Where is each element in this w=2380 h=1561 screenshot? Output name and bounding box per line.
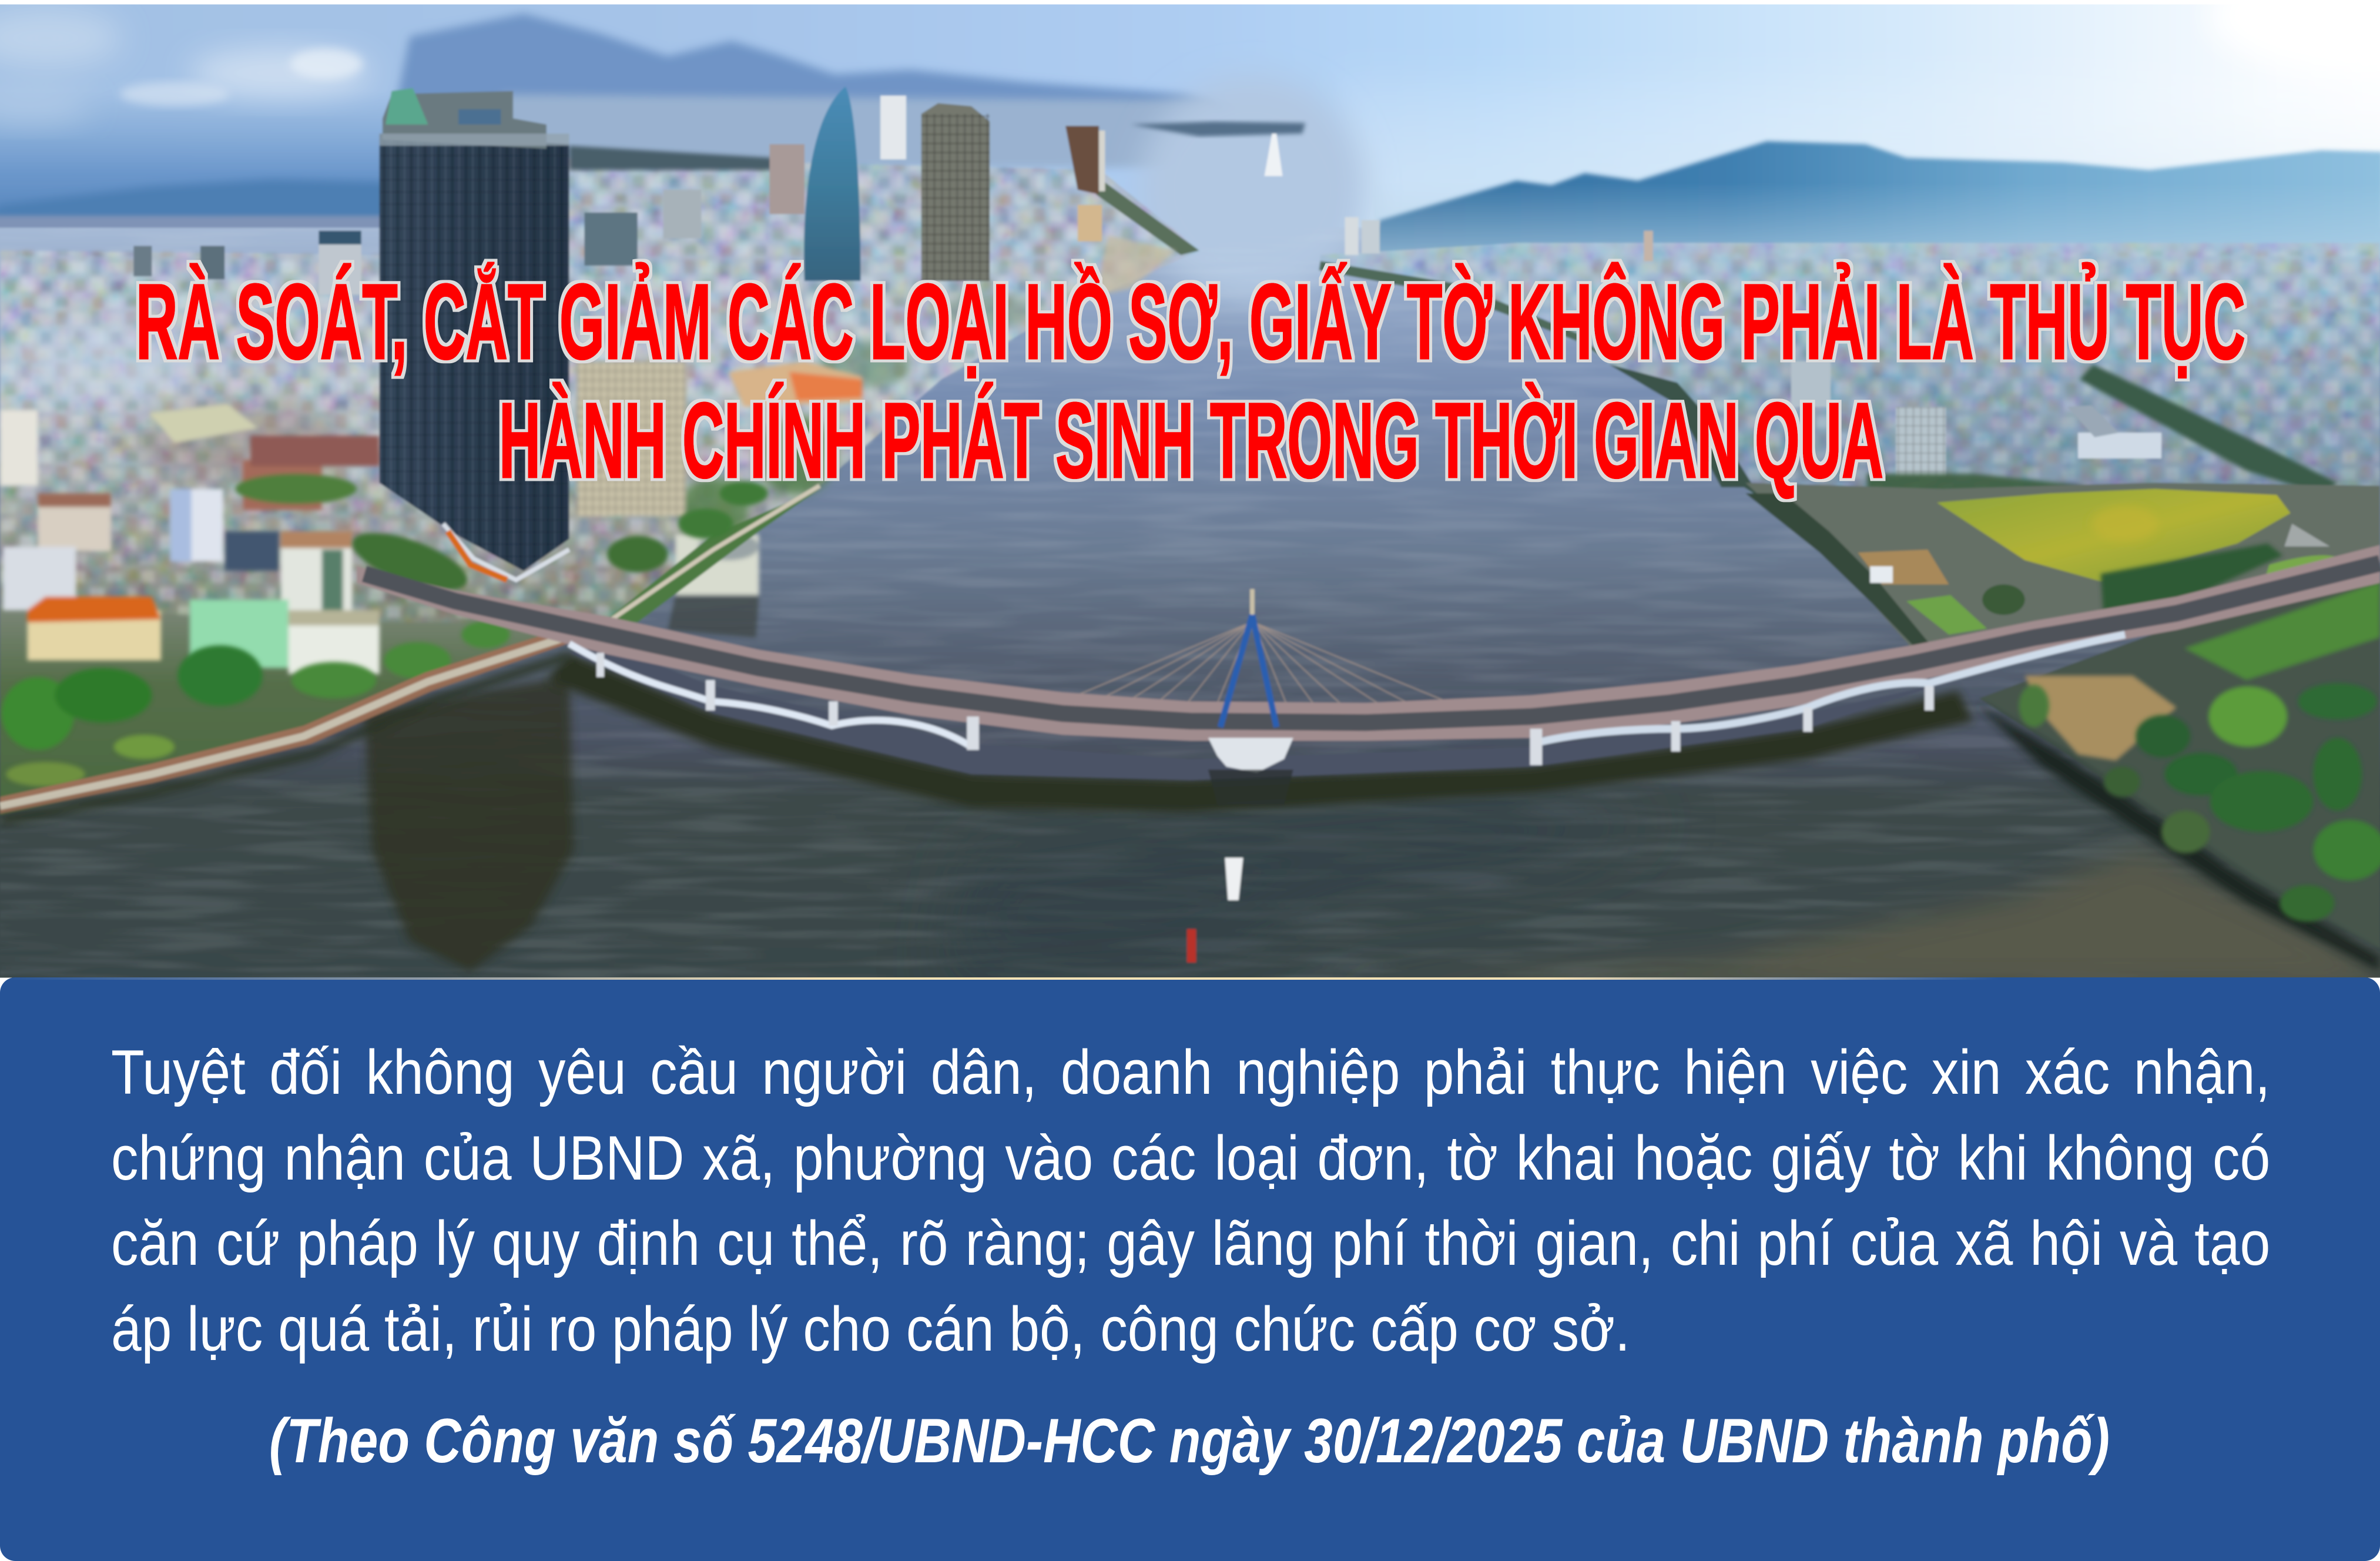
left city land bbox=[0, 146, 1199, 815]
bridge reflections and cable fan bbox=[1062, 622, 1457, 713]
far mountains behind city bbox=[0, 14, 1237, 258]
cable-stayed pylon bbox=[1208, 589, 1293, 805]
title bbox=[136, 259, 2247, 502]
panel top highlight line bbox=[0, 977, 2380, 980]
bridge piers bbox=[596, 653, 1934, 765]
river buoys bbox=[1187, 857, 1243, 963]
body text block: chứng nhận của UBND xã, phường vào các loại đơn, tờ khai hoặc giấy tờ khi không có bbox=[111, 1123, 2270, 1193]
body text block: áp lực quá tải, rủi ro pháp lý cho cán bộ, công chức cấp cơ sở. bbox=[111, 1294, 1630, 1364]
bridge deck bbox=[357, 545, 2380, 747]
left low-rise buildings bbox=[0, 361, 862, 674]
sky bbox=[0, 5, 2380, 228]
left trees and riverside promenade bbox=[0, 481, 820, 821]
right city bbox=[1319, 217, 2380, 651]
right bank park and lawns bbox=[1745, 483, 2380, 656]
panel: blue background bbox=[0, 977, 2380, 1561]
body text block: Tuyệt đối không yêu cầu người dân, doanh nghiệp phải thực hiện việc xin xác nhận, bbox=[111, 1037, 2270, 1107]
far towers bbox=[133, 86, 1105, 294]
right bank lower bbox=[1973, 580, 2380, 972]
waterfront islet and small bridge on the horizon bbox=[1131, 122, 1305, 176]
photo: aerial view of Da Nang river and bridge bbox=[0, 5, 2380, 978]
right mountains bbox=[1366, 141, 2380, 258]
river bbox=[0, 76, 2380, 987]
main skyscraper bbox=[380, 88, 569, 580]
body text block: căn cứ pháp lý quy định cụ thể, rõ ràng; gây lãng phí thời gian, chi phí của xã hội và tạo bbox=[111, 1208, 2270, 1278]
